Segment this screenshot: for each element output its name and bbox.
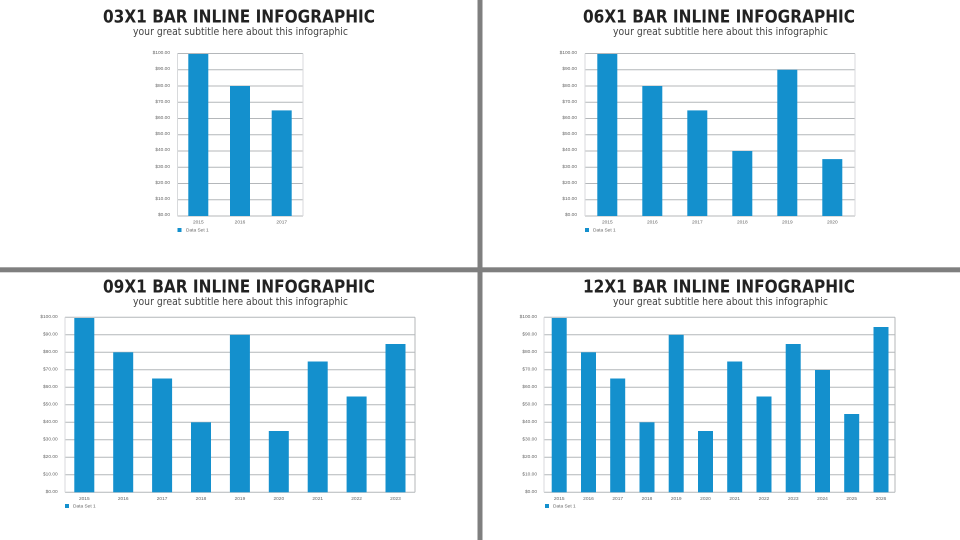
x axis labels: 2015 (193, 220, 204, 226)
x axis labels: 2021 (729, 496, 740, 502)
x axis labels: 2016 (583, 496, 594, 502)
subtitle: your great subtitle here about this infographic (613, 25, 828, 38)
y axis labels: $70.00 (562, 99, 577, 105)
y axis labels: $20.00 (43, 454, 58, 460)
panel: 09x1 chart (40, 278, 415, 510)
bars (188, 54, 292, 216)
x axis labels: 2019 (782, 220, 793, 226)
y axis labels: $80.00 (43, 349, 58, 355)
panel: 03x1 chart (103, 8, 375, 234)
y axis labels: $70.00 (155, 99, 170, 105)
x axis labels: 2020 (700, 496, 711, 502)
bars (74, 318, 406, 492)
x axis labels: 2016 (647, 220, 658, 226)
x axis labels (79, 496, 401, 502)
panel: 12x1 chart (520, 278, 895, 510)
y axis labels: $50.00 (43, 402, 58, 408)
x axis labels: 2025 (846, 496, 857, 502)
title: 03X1 BAR INLINE INFOGRAPHIC (103, 8, 375, 28)
x axis labels: 2015 (602, 220, 613, 226)
y axis labels: $40.00 (562, 147, 577, 153)
y axis labels: $100.00 (153, 50, 170, 56)
y axis labels: $30.00 (43, 436, 58, 442)
y axis labels: $100.00 (520, 314, 537, 320)
y axis labels (560, 50, 577, 218)
y axis labels: $10.00 (562, 196, 577, 202)
y axis labels: $100.00 (40, 314, 58, 320)
x axis labels: 2023 (390, 496, 401, 502)
y axis labels: $0.00 (158, 212, 170, 218)
x axis labels: 2020 (273, 496, 284, 502)
legend (545, 504, 576, 510)
subtitle: your great subtitle here about this infographic (613, 295, 828, 308)
y axis labels: $10.00 (522, 472, 537, 478)
y axis labels: $60.00 (155, 115, 170, 121)
y axis labels: $30.00 (155, 164, 170, 170)
x axis labels: 2021 (312, 496, 323, 502)
y axis labels: $20.00 (155, 180, 170, 186)
legend (585, 228, 616, 234)
y axis labels: $40.00 (155, 147, 170, 153)
y axis labels: $60.00 (562, 115, 577, 121)
y axis labels (40, 314, 58, 495)
y axis labels: $90.00 (43, 332, 58, 338)
x axis labels: 2019 (671, 496, 682, 502)
y axis labels (520, 314, 537, 495)
y axis labels: $10.00 (43, 472, 58, 478)
bar chart (520, 314, 895, 510)
x axis labels: 2017 (612, 496, 623, 502)
y axis labels: $80.00 (562, 83, 577, 89)
y axis labels: $30.00 (522, 436, 537, 442)
y axis labels: $40.00 (43, 419, 58, 425)
subtitle: your great subtitle here about this infographic (133, 25, 348, 38)
x axis labels: 2015 (554, 496, 565, 502)
y axis labels: $20.00 (562, 180, 577, 186)
y axis labels: $90.00 (522, 332, 537, 338)
x axis labels: 2022 (351, 496, 362, 502)
y axis labels: $0.00 (46, 489, 58, 495)
y axis labels: $70.00 (522, 366, 537, 372)
x axis labels (602, 220, 838, 226)
x axis labels: 2016 (118, 496, 129, 502)
subtitle: your great subtitle here about this infographic (133, 295, 348, 308)
bar chart (40, 314, 415, 510)
x axis labels: 2026 (876, 496, 887, 502)
title: 06X1 BAR INLINE INFOGRAPHIC (583, 8, 855, 28)
legend: Data Set 1 (186, 228, 209, 234)
y axis labels: $50.00 (562, 131, 577, 137)
y axis labels: $0.00 (525, 489, 537, 495)
y axis labels: $90.00 (155, 66, 170, 72)
x axis labels: 2019 (235, 496, 246, 502)
legend (65, 504, 96, 510)
legend (178, 228, 209, 234)
x axis labels: 2024 (817, 496, 828, 502)
y axis labels: $30.00 (562, 164, 577, 170)
x axis labels: 2018 (737, 220, 748, 226)
y axis labels: $20.00 (522, 454, 537, 460)
panel: 06x1 chart (560, 8, 855, 234)
y axis labels: $50.00 (155, 131, 170, 137)
y axis labels: $10.00 (155, 196, 170, 202)
legend: Data Set 1 (73, 504, 96, 510)
x axis labels: 2015 (79, 496, 90, 502)
y axis labels: $40.00 (522, 419, 537, 425)
y axis labels: $70.00 (43, 366, 58, 372)
bars (597, 54, 842, 216)
x axis labels: 2017 (692, 220, 703, 226)
x axis labels (554, 496, 887, 502)
y axis labels: $90.00 (562, 66, 577, 72)
x axis labels: 2016 (235, 220, 246, 226)
bar chart (153, 50, 303, 234)
x axis labels: 2017 (157, 496, 168, 502)
y axis labels: $60.00 (43, 384, 58, 390)
x axis labels: 2020 (827, 220, 838, 226)
legend: Data Set 1 (553, 504, 576, 510)
x axis labels: 2022 (759, 496, 770, 502)
y axis labels (153, 50, 170, 218)
y axis labels: $80.00 (522, 349, 537, 355)
x axis labels: 2018 (196, 496, 207, 502)
bar chart (560, 50, 855, 234)
title: 12X1 BAR INLINE INFOGRAPHIC (583, 278, 855, 298)
title: 09X1 BAR INLINE INFOGRAPHIC (103, 278, 375, 298)
bars (552, 318, 888, 492)
y axis labels: $50.00 (522, 402, 537, 408)
x axis labels (193, 220, 287, 226)
y axis labels: $60.00 (522, 384, 537, 390)
x axis labels: 2023 (788, 496, 799, 502)
x axis labels: 2018 (642, 496, 653, 502)
y axis labels: $0.00 (565, 212, 577, 218)
x axis labels: 2017 (276, 220, 287, 226)
y axis labels: $80.00 (155, 83, 170, 89)
y axis labels: $100.00 (560, 50, 577, 56)
legend: Data Set 1 (593, 228, 616, 234)
